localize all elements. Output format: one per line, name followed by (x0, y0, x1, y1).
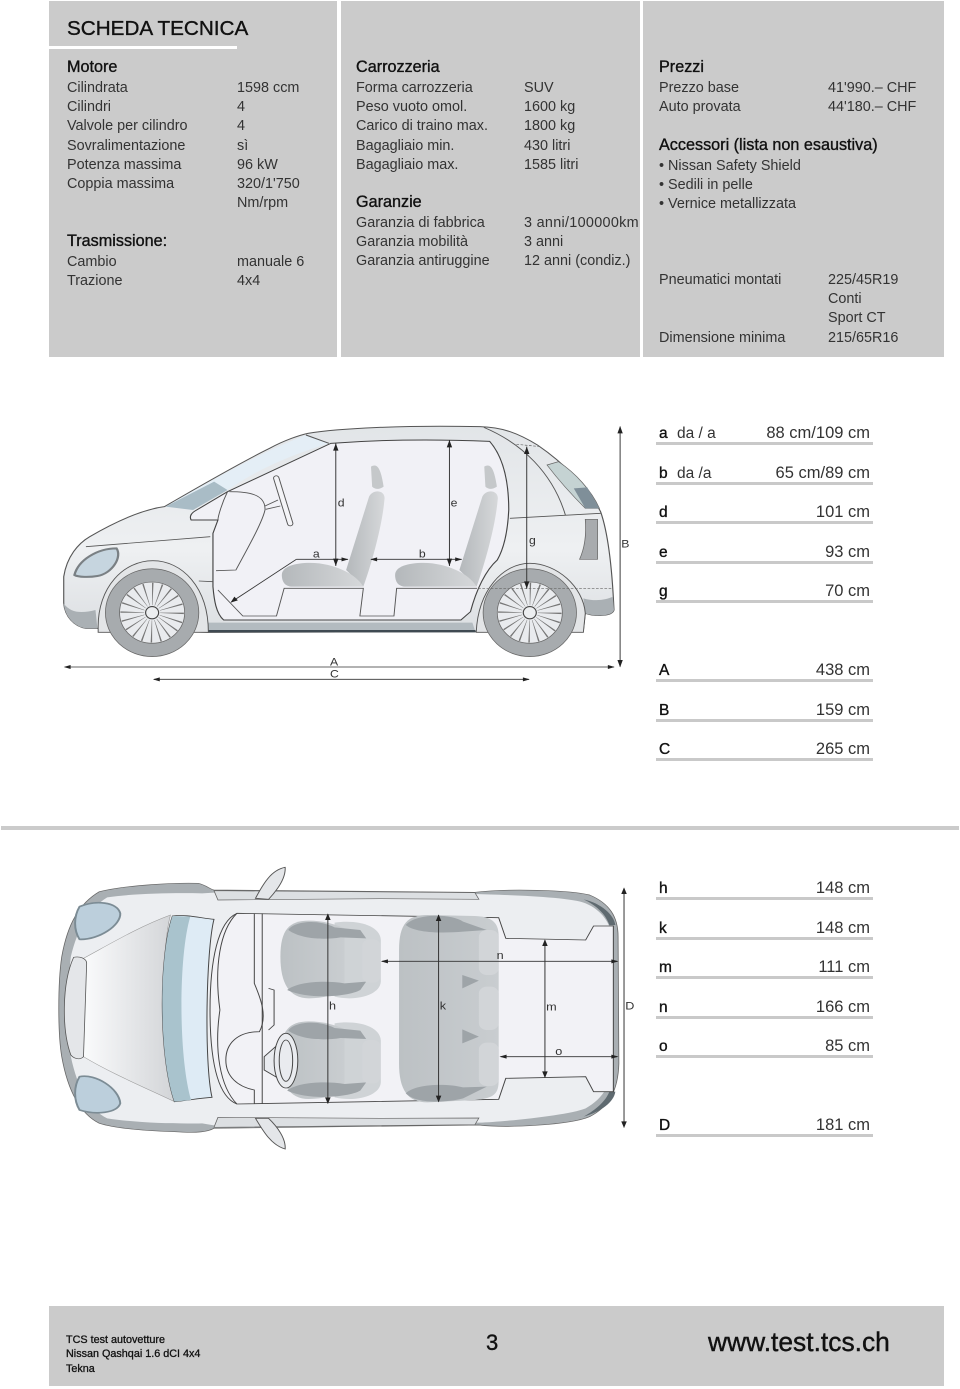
block: motore: Nm/rpm (237, 195, 288, 211)
block: pneumatici: 215/65R16 (828, 330, 898, 346)
block: garanzie (356, 193, 639, 269)
block: pneumatici: Dimensione minima (659, 330, 785, 346)
row b: b (659, 465, 668, 482)
panel: motore e trasmissione (49, 1, 337, 357)
row n (656, 997, 873, 1019)
row e: e (659, 544, 668, 561)
chart: top view of car with dimensions (58, 866, 634, 1150)
block: trasmissione: manuale 6 (237, 254, 304, 270)
footer band (49, 1306, 944, 1386)
block: trasmissione: Trasmissione: (67, 232, 167, 250)
arrow heads (325, 887, 627, 1128)
block: accessori: • Sedili in pelle (659, 177, 753, 193)
row k: 148 cm (816, 919, 870, 937)
mirrors (255, 867, 285, 1149)
dimension letters: m (546, 1001, 557, 1013)
block: trasmissione: 4x4 (237, 273, 260, 289)
block: carrozzeria: 1600 kg (524, 99, 575, 115)
row g (656, 581, 873, 603)
hood panel (64, 957, 87, 1059)
dimension letters: g (529, 536, 536, 547)
row a: da / a (677, 425, 716, 442)
dimension letters: d (338, 498, 345, 509)
row D (656, 1115, 873, 1137)
block: garanzie: Garanzia mobilità (356, 234, 468, 250)
rear corner shading (584, 899, 615, 1117)
section divider (1, 826, 959, 830)
block: pneumatici (659, 272, 898, 346)
row h (656, 878, 873, 900)
block: carrozzeria: Peso vuoto omol. (356, 99, 467, 115)
block: motore: 96 kW (237, 157, 278, 173)
row d: 101 cm (816, 503, 870, 521)
tail light (580, 519, 598, 559)
block: garanzie: 12 anni (condiz.) (524, 253, 630, 269)
block: accessori (658, 136, 878, 212)
steering wheel (265, 475, 293, 526)
row o: o (659, 1038, 668, 1055)
row A: A (659, 662, 669, 679)
row a (656, 423, 873, 445)
lower body shading (64, 597, 614, 632)
title underline (49, 46, 237, 49)
block: carrozzeria: Forma carrozzeria (356, 80, 473, 96)
row g: g (659, 583, 668, 600)
dimension letters: B (621, 539, 630, 550)
block: pneumatici: Conti (828, 291, 862, 307)
row D: D (659, 1117, 670, 1134)
footer test info: Tekna (66, 1363, 95, 1375)
dimension letters: D (625, 1000, 634, 1012)
row e: 93 cm (825, 543, 870, 561)
block: motore: 320/1'750 (237, 176, 300, 192)
block: motore: Sovralimentazione (67, 138, 185, 154)
body top surface (68, 893, 613, 1125)
block: garanzie: 3 anni (524, 234, 563, 250)
block: pneumatici: Sport CT (828, 310, 886, 326)
block: trasmissione: Trazione (67, 273, 122, 289)
body lines (86, 427, 601, 582)
footer test info: TCS test autovetture (66, 1334, 165, 1346)
block: motore: Coppia massima (67, 176, 174, 192)
block: carrozzeria: Bagagliaio min. (356, 138, 454, 154)
block: carrozzeria: 1585 litri (524, 157, 578, 173)
row n: n (659, 999, 668, 1016)
dimension arrows (328, 888, 624, 1127)
block: carrozzeria: Carrozzeria (356, 58, 440, 76)
block: motore: Cilindri (67, 99, 111, 115)
row B: 159 cm (816, 701, 870, 719)
row h: h (659, 880, 668, 897)
row m: 111 cm (818, 958, 870, 976)
row B (656, 700, 873, 722)
row k (656, 918, 873, 940)
block: motore: 1598 ccm (237, 80, 299, 96)
dashed reference lines (478, 444, 612, 589)
row d (656, 502, 873, 524)
block: motore: sì (237, 138, 248, 154)
row d: d (659, 504, 668, 521)
dimension arrows (65, 427, 620, 679)
block: motore: Motore (67, 58, 117, 76)
block: motore (67, 58, 300, 211)
steering wheel (264, 1033, 298, 1088)
headlights (75, 903, 120, 1113)
block: motore: Cilindrata (67, 80, 128, 96)
block: prezzi: 44'180.– CHF (828, 99, 916, 115)
dimension letters (329, 950, 634, 1058)
block: accessori: Accessori (lista non esaustiva) (659, 136, 878, 154)
rear wheel (483, 569, 576, 657)
dimension letters (313, 498, 630, 680)
row b: da /a (677, 465, 711, 482)
row o (656, 1036, 873, 1058)
front wheel (105, 569, 199, 657)
block: motore: 4 (237, 118, 245, 134)
block: pneumatici: 225/45R19 (828, 272, 898, 288)
page number: 3 (486, 1330, 498, 1355)
rear window (547, 462, 599, 508)
panel: carrozzeria e garanzie (341, 1, 640, 357)
row n: 166 cm (816, 998, 870, 1016)
block: carrozzeria: 430 litri (524, 138, 570, 154)
row a: a (659, 425, 668, 442)
block: carrozzeria: Bagagliaio max. (356, 157, 458, 173)
dimension letters: n (497, 950, 504, 962)
interior cutaway (190, 440, 509, 620)
dimension letters: e (451, 498, 457, 509)
rear seat (395, 466, 498, 587)
car body (59, 883, 619, 1132)
block: carrozzeria: Carico di traino max. (356, 118, 488, 134)
block: prezzi: Prezzo base (659, 80, 739, 96)
panel: prezzi e accessori (643, 1, 944, 357)
block: carrozzeria: 1800 kg (524, 118, 575, 134)
block: garanzie: Garanzie (356, 193, 422, 211)
windshield (166, 435, 329, 510)
row C: C (659, 741, 670, 758)
arrow heads (64, 426, 623, 681)
dimension letters: o (555, 1046, 563, 1058)
block: trasmissione (67, 232, 304, 289)
hood (83, 915, 174, 1102)
dimension letters: C (330, 669, 339, 680)
car body (64, 426, 614, 632)
row m: m (659, 959, 672, 976)
footer test info: Nissan Qashqai 1.6 dCI 4x4 (66, 1348, 200, 1360)
block: prezzi: 41'990.– CHF (828, 80, 916, 96)
row a: 88 cm/109 cm (766, 424, 870, 442)
block: prezzi (659, 58, 916, 115)
row o: 85 cm (825, 1037, 870, 1055)
door strips (214, 891, 479, 1127)
block: carrozzeria: SUV (524, 80, 554, 96)
title: SCHEDA TECNICA (67, 17, 248, 40)
row k: k (659, 920, 667, 937)
chart: side view of car with dimensions (63, 426, 630, 682)
block: prezzi: Auto provata (659, 99, 741, 115)
block: garanzie: 3 anni/100000km (524, 215, 639, 231)
block: garanzie: Garanzia di fabbrica (356, 215, 485, 231)
interior cutaway (210, 913, 613, 1104)
row C: 265 cm (816, 740, 870, 758)
rear bench (399, 915, 499, 1102)
block: motore: 4 (237, 99, 245, 115)
website: www.test.tcs.ch (708, 1327, 890, 1357)
block: carrozzeria (356, 58, 578, 173)
block: accessori: • Vernice metallizzata (659, 196, 796, 212)
front seat driver (280, 1021, 381, 1099)
dashboard (216, 492, 477, 616)
block: garanzie: Garanzia antiruggine (356, 253, 490, 269)
dimension letters: a (313, 549, 320, 560)
dimension letters: h (329, 1000, 336, 1012)
row A (656, 660, 873, 682)
row A: 438 cm (816, 661, 870, 679)
dimension table: top view (656, 879, 873, 1137)
row h: 148 cm (816, 879, 870, 897)
dimension letters: A (330, 657, 339, 668)
dashboard lines (218, 913, 274, 1104)
wheel arches (98, 561, 585, 632)
footer test info (66, 1334, 200, 1375)
front seat (282, 466, 385, 587)
block: trasmissione: Cambio (67, 254, 117, 270)
block: pneumatici: Pneumatici montati (659, 272, 781, 288)
headlight (74, 548, 118, 577)
row g: 70 cm (825, 582, 870, 600)
dimension letters: k (440, 1000, 446, 1012)
row b: 65 cm/89 cm (776, 464, 870, 482)
front seat passenger (280, 921, 381, 998)
block: motore: Valvole per cilindro (67, 118, 188, 134)
row m (656, 957, 873, 979)
dimension table: side view (656, 424, 873, 761)
block: prezzi: Prezzi (659, 58, 704, 76)
row e (656, 542, 873, 564)
row b (656, 463, 873, 485)
row D: 181 cm (816, 1116, 870, 1134)
block: accessori: • Nissan Safety Shield (659, 158, 801, 174)
row C (656, 739, 873, 761)
row B: B (659, 702, 669, 719)
windshield (162, 915, 214, 1102)
block: motore: Potenza massima (67, 157, 181, 173)
dimension letters: b (419, 549, 426, 560)
